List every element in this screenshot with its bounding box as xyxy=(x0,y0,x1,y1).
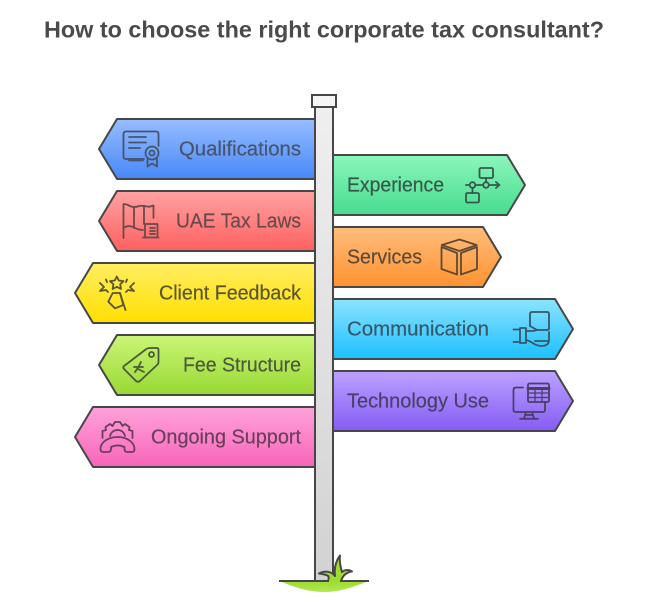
label: UAE Tax Laws: UAE Tax Laws xyxy=(176,210,301,232)
icon: monitor with spreadsheet xyxy=(514,384,549,419)
icon: certificate xyxy=(124,132,158,166)
icon: price tag xyxy=(123,348,158,382)
sign: Qualifications xyxy=(99,119,315,179)
icon: process flow xyxy=(466,168,500,202)
label: Qualifications: Qualifications xyxy=(179,138,301,160)
label: Ongoing Support: Ongoing Support xyxy=(151,426,301,448)
grass base xyxy=(279,556,369,592)
icon: gear and telephone xyxy=(100,422,134,452)
sign: Fee Structure xyxy=(99,335,315,395)
sign: Technology Use xyxy=(333,371,573,431)
label: Fee Structure: Fee Structure xyxy=(183,354,301,376)
label: Client Feedback: Client Feedback xyxy=(159,282,302,304)
title: How to choose the right corporate tax consultant? xyxy=(44,16,604,42)
label: Services: Services xyxy=(347,246,422,268)
sign: Services xyxy=(333,227,501,287)
label: Experience: Experience xyxy=(347,174,444,196)
sign: UAE Tax Laws xyxy=(99,191,315,251)
sign: Client Feedback xyxy=(75,263,315,323)
label: Communication: Communication xyxy=(347,318,489,340)
icon: stars and flag xyxy=(100,276,134,310)
icon: handshake and speech bubble xyxy=(514,312,549,346)
label: Technology Use: Technology Use xyxy=(347,390,489,412)
signpost pole xyxy=(312,95,336,581)
icon: map with law document xyxy=(124,204,158,238)
sign: Experience xyxy=(333,155,525,215)
icon: box xyxy=(442,240,477,274)
sign: Ongoing Support xyxy=(75,407,315,467)
sign: Communication xyxy=(333,299,573,359)
